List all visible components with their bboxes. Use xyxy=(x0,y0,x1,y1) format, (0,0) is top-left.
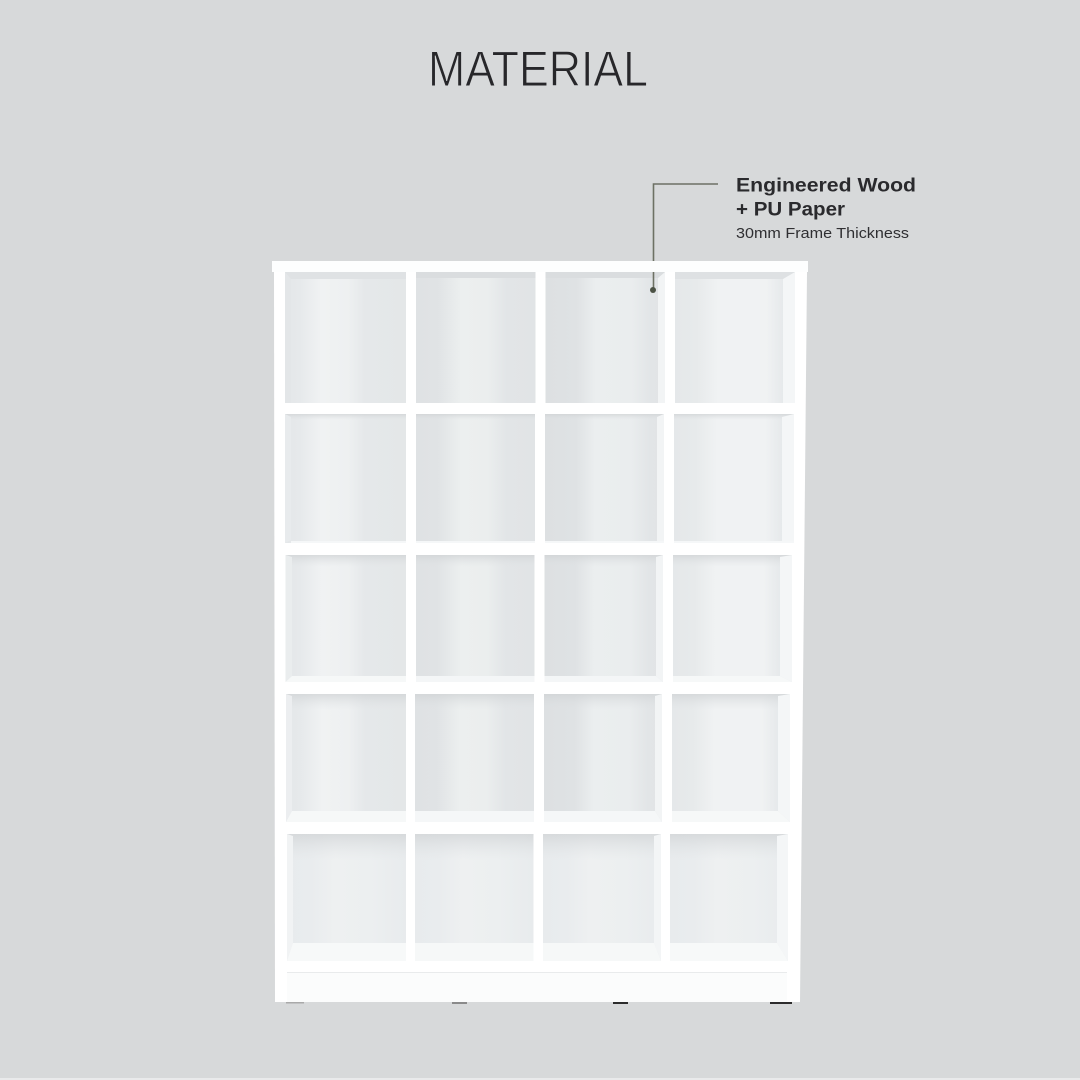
row 4 cubbies xyxy=(286,694,790,822)
callout leader line xyxy=(654,184,718,290)
cubby r2c4 xyxy=(674,414,794,543)
callout anchor dot xyxy=(650,287,656,293)
callout text: frame thickness: 30mm Frame Thickness xyxy=(736,226,909,242)
row 3 cubbies xyxy=(286,555,792,682)
cubby r1c2 xyxy=(416,272,536,403)
shelf frame xyxy=(274,272,807,1002)
cubby r4c2 xyxy=(415,694,534,822)
callout text: material name: Engineered Wood xyxy=(736,174,916,196)
cubby r3c3 xyxy=(544,555,663,682)
cubby r1c4 xyxy=(675,272,795,403)
cubby r2c3 xyxy=(545,414,664,543)
row 2 cubbies xyxy=(285,414,794,543)
callout text: material name xyxy=(736,174,916,220)
cubby r1c1 xyxy=(285,272,406,403)
cubby r3c2 xyxy=(416,555,534,682)
cubby r1c3 xyxy=(546,272,665,403)
row 1 cubbies xyxy=(285,272,795,403)
cubby r3c4 xyxy=(673,555,792,682)
cubby r5c1 xyxy=(287,834,406,961)
top board xyxy=(272,261,808,272)
cubby r2c1 xyxy=(285,414,406,543)
cubby r3c1 xyxy=(286,555,406,682)
cubby r5c3 xyxy=(543,834,661,961)
callout text: material name: + PU Paper xyxy=(736,198,845,220)
plinth xyxy=(287,972,787,1002)
bookshelf xyxy=(272,261,808,1004)
callout leader over shelf xyxy=(650,272,656,293)
cubby r4c1 xyxy=(286,694,406,822)
cubby r5c4 xyxy=(670,834,788,961)
cubby r4c4 xyxy=(672,694,790,822)
title: MATERIAL xyxy=(428,41,648,97)
cubby r5c2 xyxy=(415,834,534,961)
row 5 cubbies xyxy=(287,834,788,961)
shelf feet xyxy=(286,1001,792,1004)
callout: material xyxy=(654,174,916,290)
cubby r4c3 xyxy=(544,694,662,822)
cubby r2c2 xyxy=(416,414,535,543)
